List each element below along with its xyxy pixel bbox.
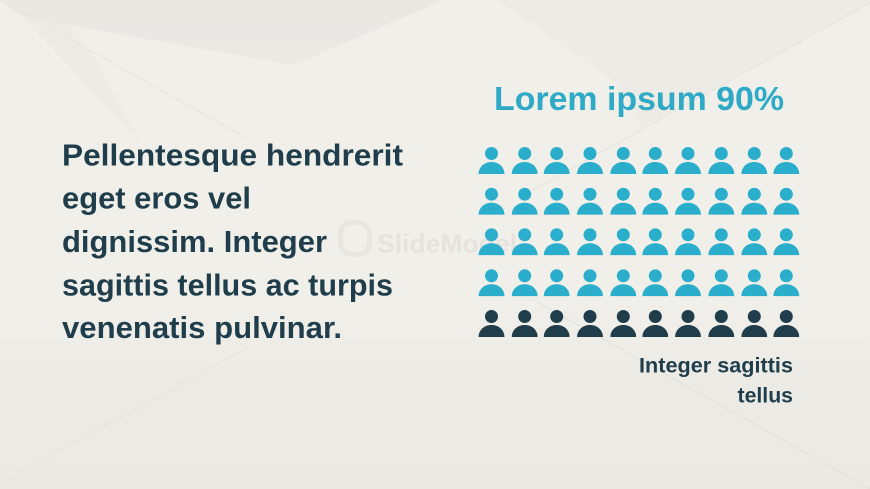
chart caption: tellus — [738, 384, 793, 408]
row 5: dark people — [478, 310, 799, 337]
body text block — [62, 138, 403, 345]
body text block: eget eros vel — [62, 180, 251, 216]
row 1: blue people — [478, 147, 799, 174]
body text block: dignissim. Integer — [62, 224, 327, 259]
row 2: blue people — [478, 188, 799, 215]
title: Lorem ipsum 90% — [494, 80, 784, 117]
pictogram chart: 90% highlighted — [478, 147, 799, 337]
row 4: blue people — [478, 269, 799, 296]
row 3: blue people — [478, 228, 799, 255]
watermark: SlideModel — [377, 228, 517, 258]
body text block: Pellentesque hendrerit — [62, 138, 403, 172]
body text block: venenatis pulvinar. — [62, 310, 342, 345]
chart caption — [639, 354, 793, 408]
chart caption: Integer sagittis — [639, 354, 793, 378]
body text block: sagittis tellus ac turpis — [62, 268, 393, 302]
watermark — [340, 222, 517, 258]
